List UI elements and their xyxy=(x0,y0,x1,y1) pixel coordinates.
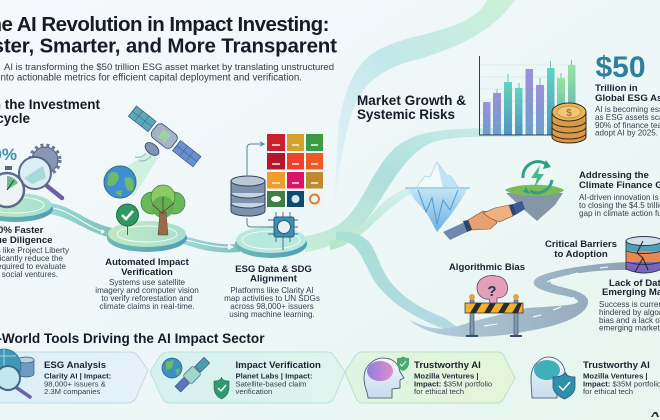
icon: head with teal brain and shield xyxy=(531,357,575,399)
stat: 50 trillion: adopt AI by 2025. xyxy=(595,128,658,138)
step 2 text: climate claims in real-time. xyxy=(99,302,195,311)
step 2 text: Verification xyxy=(121,267,173,278)
card: ESG analysis: ESG Analysis xyxy=(44,360,106,371)
heading: critical barriers: to Adoption xyxy=(554,249,608,260)
step 3 text: ESG Data & SDG xyxy=(235,264,312,275)
heading: investment lifecycle xyxy=(0,97,100,126)
card: trustworthy AI Mozilla: Mozilla Ventures | xyxy=(414,372,479,380)
icon: renewable energy cycle xyxy=(523,160,552,194)
step 2 text: Systems use satellite xyxy=(109,278,186,287)
step 3 text: map activities to UN SDGs xyxy=(224,294,320,303)
card: ESG analysis: 2.3M companies xyxy=(44,387,101,396)
step 2 text: Automated Impact xyxy=(105,257,190,268)
platform 1 xyxy=(0,193,53,222)
card: trustworthy AI shield: for ethical tech xyxy=(583,387,633,396)
step 1 text: social ventures. xyxy=(2,270,58,279)
icon: globe xyxy=(104,166,136,198)
icon: database and magnifier xyxy=(0,349,34,397)
step 1 text xyxy=(0,225,70,279)
platform 3 xyxy=(235,227,307,258)
card: impact verification: Satellite-based claim xyxy=(236,380,306,388)
card: ESG analysis: 98,000+ issuers & xyxy=(44,380,106,388)
icon: satellite xyxy=(108,104,202,196)
step 3 text: across 98,000+ issuers xyxy=(230,302,314,311)
heading: critical barriers: Critical Barriers xyxy=(545,239,617,250)
icon: coin stack xyxy=(552,103,586,143)
arrow: data to SDG xyxy=(247,142,272,227)
card: trustworthy AI Mozilla: for ethical tech xyxy=(414,387,464,396)
card: ESG analysis: Clarity AI | Impact: xyxy=(44,372,111,380)
icon: corner logo xyxy=(651,412,659,417)
icon: coin stack: $ xyxy=(566,108,572,119)
step 3 text: using machine learning. xyxy=(229,310,315,319)
icon: brain with question mark: ? xyxy=(487,283,497,300)
stat: 50 trillion: $50 xyxy=(596,51,646,84)
icon: check pin xyxy=(116,204,138,235)
card: trustworthy AI Mozilla xyxy=(345,352,515,403)
platform connectors xyxy=(48,203,240,253)
step 2 text: imagery and computer vision xyxy=(95,286,199,295)
heading: climate finance gap: Addressing the xyxy=(579,170,649,181)
card: impact verification: Impact Verification xyxy=(236,360,321,371)
stat: 50 trillion: Trillion in xyxy=(595,83,638,94)
step 3 text: Platforms like Clarity AI xyxy=(230,286,314,295)
card: impact verification xyxy=(150,352,345,403)
heading: market growth xyxy=(357,93,466,122)
heading: critical barriers xyxy=(545,239,617,260)
icon: database xyxy=(231,176,265,216)
subtitle xyxy=(0,62,334,84)
icon: tree xyxy=(141,185,185,235)
icon: globe, satellite and shield xyxy=(162,356,229,399)
text: lack of data xyxy=(599,278,660,332)
card: trustworthy AI Mozilla: Trustworthy AI xyxy=(414,360,481,371)
card: impact verification: Planet Labs | Impact: xyxy=(236,372,312,380)
platform 2 xyxy=(107,221,187,252)
card: trustworthy AI shield xyxy=(531,357,660,399)
ribbon: upper market flow xyxy=(334,0,515,205)
step 2 text: to verify reforestation and xyxy=(101,294,193,303)
icon: brain with question mark xyxy=(477,275,508,303)
ribbon: link to climate finance xyxy=(330,188,415,250)
card: trustworthy AI shield: Mozilla Ventures | xyxy=(583,372,648,380)
icon: cracked database xyxy=(626,236,660,273)
step 2 text xyxy=(95,257,199,311)
icon: floating island xyxy=(505,185,564,221)
card: ESG analysis xyxy=(0,349,148,403)
card: trustworthy AI Mozilla: Impact: $35M portfolio xyxy=(414,380,492,388)
icon: barrier xyxy=(465,294,523,336)
ribbon: link to market growth xyxy=(305,128,520,252)
heading: algorithmic bias: Algorithmic Bias xyxy=(449,262,525,273)
subtitle: AI is transforming the $50 trillion ESG asset market by translating unstructured xyxy=(4,62,334,73)
card: trustworthy AI shield: Impact: $35M portfolio xyxy=(583,380,660,388)
road to adoption xyxy=(410,262,628,337)
SDG grid xyxy=(267,134,323,207)
ribbon: link to barriers xyxy=(336,231,470,337)
step 3 text: Alignment xyxy=(250,274,298,284)
card: impact verification: verification xyxy=(236,387,272,396)
heading: market growth: Market Growth & xyxy=(357,93,466,108)
bar chart xyxy=(480,56,576,135)
icon: head with brain and shield xyxy=(364,356,409,398)
icon: magnifier xyxy=(19,157,62,198)
card: trustworthy AI shield: Trustworthy AI xyxy=(583,360,650,371)
heading: climate finance gap xyxy=(579,170,660,218)
icon: AI chip xyxy=(268,212,298,250)
icon: handshake xyxy=(443,201,525,240)
icon: iceberg xyxy=(405,162,470,232)
stat: 50 trillion xyxy=(595,51,660,138)
heading: market growth: Systemic Risks xyxy=(357,107,455,122)
step 3 text xyxy=(224,264,320,319)
title xyxy=(0,13,337,58)
icon: stopwatch xyxy=(0,166,24,207)
icon: gear xyxy=(30,145,60,175)
